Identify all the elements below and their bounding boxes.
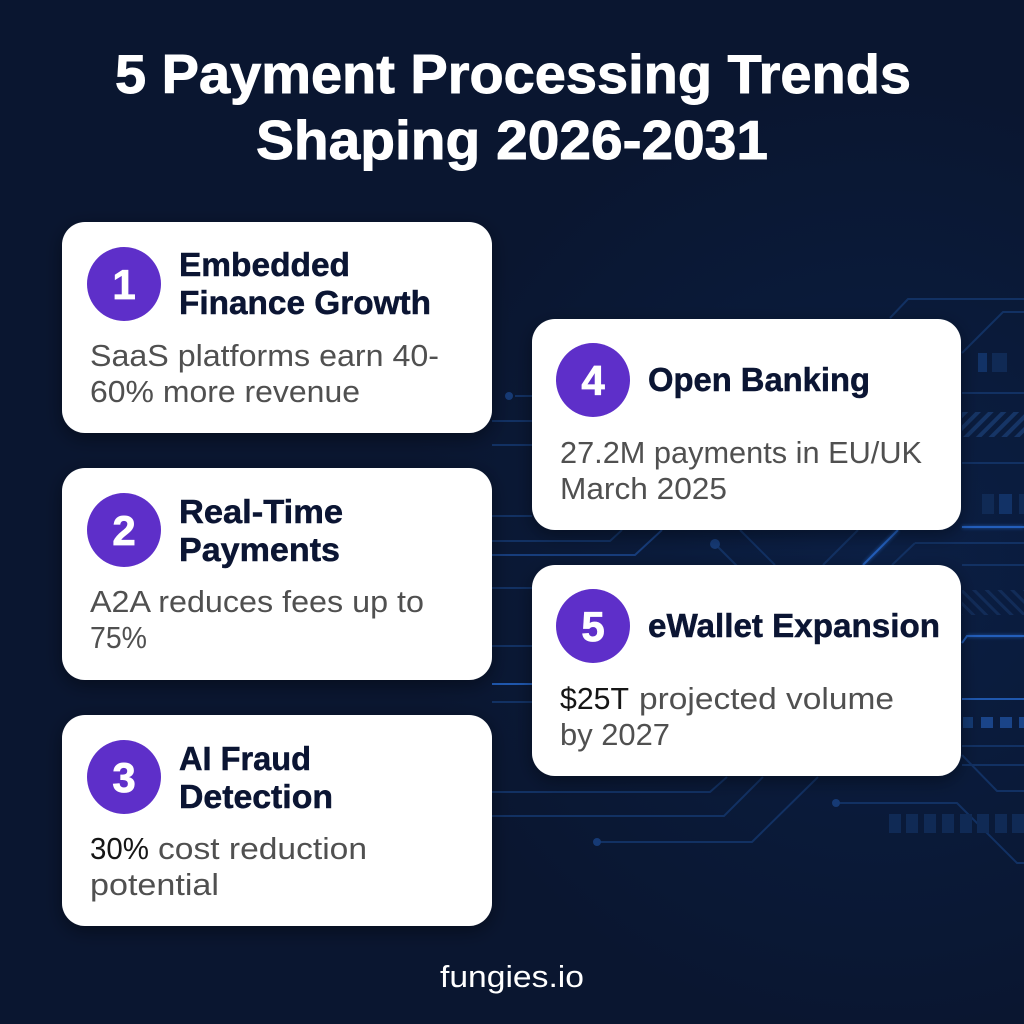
body text: cost reduction: 30% <box>90 831 149 866</box>
body text: projected volume: projected volume <box>639 681 894 716</box>
number badge 1: 1 <box>112 261 136 308</box>
body text: cost reduction: potential <box>90 867 219 902</box>
heading: ewallet expansion: eWallet Expansion <box>648 607 940 644</box>
number badge 3: 3 <box>112 754 136 801</box>
panel: trend 4 open banking <box>532 319 961 530</box>
body text: projected volume: by 2027 <box>560 717 670 752</box>
body text: cost reduction <box>90 831 367 902</box>
number badge 1 <box>87 247 161 321</box>
body text: cost reduction: cost reduction <box>158 831 367 866</box>
circuit nodes <box>505 392 840 846</box>
heading: real-time payments: Real-Time <box>179 493 343 530</box>
heading: embedded finance growth <box>179 246 431 321</box>
body text: fees <box>90 584 424 655</box>
number badge 2: 2 <box>112 507 136 554</box>
number badge 5 <box>556 589 630 663</box>
body text: projected volume <box>560 681 894 752</box>
heading: real-time payments: Payments <box>179 531 340 568</box>
heading: ai fraud detection: AI Fraud <box>179 740 311 777</box>
body text: revenue: 60% more revenue <box>90 374 360 409</box>
panel: trend 3 ai fraud detection <box>62 715 492 926</box>
number badge 5: 5 <box>581 603 605 650</box>
heading: ai fraud detection: Detection <box>179 778 333 815</box>
circuit hatching <box>962 412 1024 615</box>
circuit data blocks <box>889 353 1024 833</box>
number badge 4: 4 <box>581 357 605 404</box>
heading: real-time payments <box>179 493 343 568</box>
body text: payments: 27.2M payments in EU/UK <box>560 435 922 470</box>
footer brand: fungies.io <box>440 959 584 994</box>
number badge 4 <box>556 343 630 417</box>
body text: fees: A2A reduces fees up to <box>90 584 424 619</box>
heading: embedded finance growth: Embedded <box>179 246 350 283</box>
body text: payments <box>560 435 922 506</box>
heading: ai fraud detection <box>179 740 333 815</box>
title <box>115 43 911 171</box>
heading: open banking: Open Banking <box>648 361 870 398</box>
number badge 2 <box>87 493 161 567</box>
body text: fees: 75% <box>90 620 147 655</box>
body text: projected volume: $25T <box>560 681 629 716</box>
circuit board pattern <box>492 299 1024 863</box>
number badge 3 <box>87 740 161 814</box>
body text: revenue <box>90 338 439 409</box>
panel: trend 2 real-time payments <box>62 468 492 680</box>
panel: trend 5 ewallet expansion <box>532 565 961 776</box>
title: Shaping 2026-2031 <box>256 109 768 171</box>
panel: trend 1 embedded finance growth <box>62 222 492 433</box>
title: 5 Payment Processing Trends <box>115 43 911 105</box>
heading: embedded finance growth: Finance Growth <box>179 284 431 321</box>
body text: revenue: SaaS platforms earn 40- <box>90 338 439 373</box>
body text: payments: March 2025 <box>560 471 727 506</box>
